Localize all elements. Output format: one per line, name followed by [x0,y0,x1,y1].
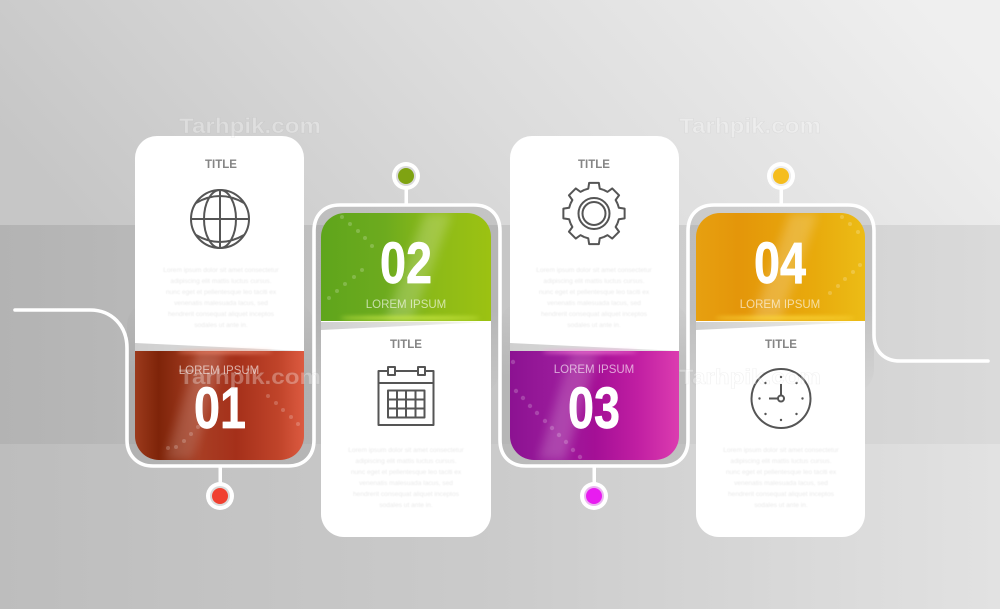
card 03 title: TITLE [578,159,610,171]
card 01 text: Lorem ipsum dolor sit amet consectetur [163,267,280,274]
card 02 glare [385,213,452,321]
card 04 number: 04 [754,231,806,296]
card 03 text: venenatis malesuada lacus, sed [547,300,641,307]
card 02 body [321,321,491,537]
marker: red node [206,466,234,510]
card 01 number: 01 [194,376,246,441]
card 03 header [510,351,679,460]
card 04 text: nunc eget et pellentesque leo taciti ex [726,469,837,476]
icon: globe [191,190,249,248]
shaded wells behind the coloured headers [127,205,874,467]
icon: clock [752,369,810,428]
card 02 number: 02 [380,231,432,296]
card 02 text: hendrerit consequat aliquet inceptos [353,491,460,498]
card 04 glow [715,316,855,320]
card 03 text: sodales ut ante in. [567,322,621,329]
card 03 text: Lorem ipsum dolor sit amet consectetur [536,267,653,274]
card 03 wedge [510,343,679,351]
card 04 label: LOREM IPSUM [740,299,820,311]
card 02 label: LOREM IPSUM [366,299,446,311]
card 02 text [348,447,465,509]
panel: card 02 [321,213,491,537]
card 03 number: 03 [568,376,620,441]
card 04 glare [752,213,818,321]
watermarks: Tarhpik.com [679,115,821,138]
card 01 text: sodales ut ante in. [194,322,248,329]
marker: magenta node [580,466,608,510]
watermarks: Tarhpik.com [179,366,321,389]
card 03 text: hendrerit consequat aliquet inceptos [541,311,648,318]
watermarks: Tarhpik.com [179,115,321,138]
card 04 text: venenatis malesuada lacus, sed [734,480,828,487]
card 04 body [696,321,865,537]
icon: gear [563,183,625,244]
card 02 dots [327,215,374,300]
card 03 text: adipiscing elit mattis luctus cursus. [543,278,645,285]
watermarks [179,115,821,389]
card 04 header [696,213,865,321]
card 03 dots [511,360,582,459]
card 03 label: LOREM IPSUM [554,364,634,376]
card 01 text [163,267,280,329]
card 02 text: venenatis malesuada lacus, sed [359,480,453,487]
card 02 text: adipiscing elit mattis luctus cursus. [355,458,457,465]
watermarks: Tarhpik.com [679,366,821,389]
card 02 glow [340,316,480,320]
card 04 text: adipiscing elit mattis luctus cursus. [730,458,832,465]
marker: yellow node [767,162,795,206]
card 02 wedge [321,322,491,330]
card 01 title: TITLE [205,159,237,171]
card 04 text: hendrerit consequat aliquet inceptos [728,491,835,498]
card 02 text: sodales ut ante in. [379,502,433,509]
card 01 body [135,136,304,351]
card 01 text: venenatis malesuada lacus, sed [174,300,268,307]
card 04 title: TITLE [765,339,797,351]
card 02 header [321,213,491,321]
card 01 dots [166,394,300,450]
marker: green node [392,162,420,206]
card 03 glow [542,350,638,354]
card 02 title: TITLE [390,339,422,351]
card 04 text [723,447,840,509]
card 01 glow [177,350,273,354]
card 01 glare [165,351,225,460]
panel: card 03 [510,136,679,460]
card 03 text: nunc eget et pellentesque leo taciti ex [539,289,650,296]
card 01 text: nunc eget et pellentesque leo taciti ex [166,289,277,296]
card 02 text: nunc eget et pellentesque leo taciti ex [351,469,462,476]
card 01 header [135,351,304,460]
card 04 wedge [696,322,865,330]
card 04 text: Lorem ipsum dolor sit amet consectetur [723,447,840,454]
card 01 wedge [135,343,304,351]
card 03 body [510,136,679,351]
card 04 dots [828,215,862,295]
panel: card 01 [135,136,304,460]
connecting line [15,205,988,466]
card 03 text [536,267,653,329]
card 01 label: LOREM IPSUM [179,365,259,377]
card 01 text: hendrerit consequat aliquet inceptos [168,311,275,318]
panel: card 04 [696,213,865,537]
card 03 glare [538,351,600,460]
card 04 text: sodales ut ante in. [754,502,808,509]
card 02 text: Lorem ipsum dolor sit amet consectetur [348,447,465,454]
icon: calendar [378,367,434,425]
card 01 text: adipiscing elit mattis luctus cursus. [170,278,272,285]
